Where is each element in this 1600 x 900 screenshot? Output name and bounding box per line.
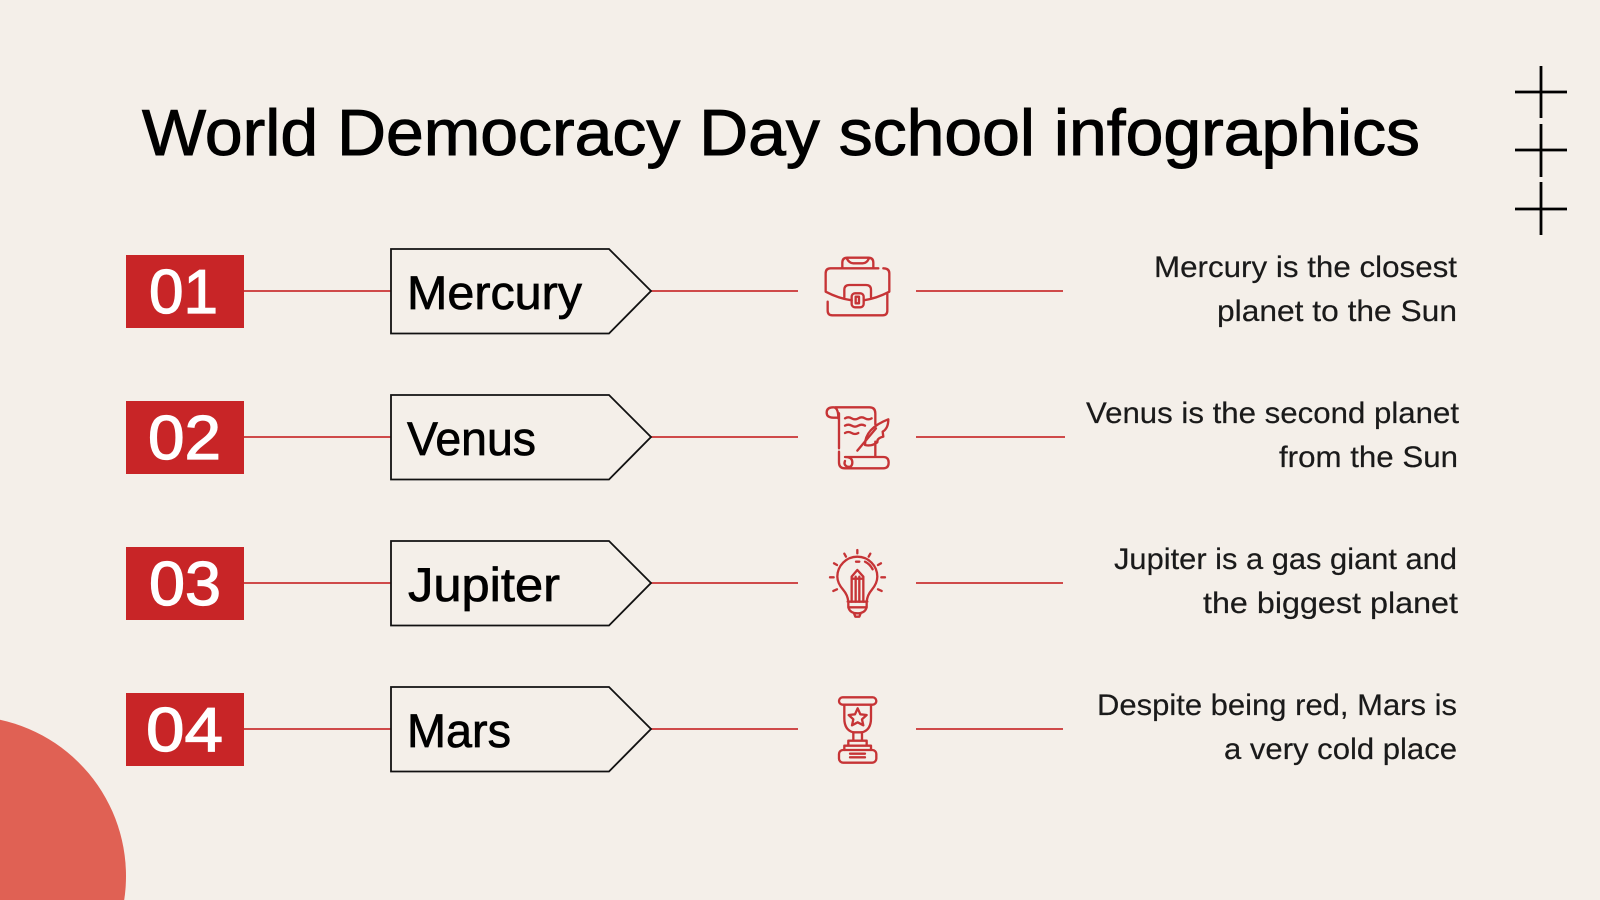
connector lines (244, 436, 1065, 438)
row 3: Jupiter (126, 541, 1459, 626)
label tag Mars: Mars (407, 704, 511, 757)
icon: scroll and quill (827, 407, 889, 468)
description: from the Sun (1279, 441, 1458, 474)
icon: light bulb with pencil (830, 550, 885, 617)
description: the biggest planet (1203, 587, 1459, 620)
number badge 04 (126, 693, 244, 766)
label tag Mars (391, 687, 651, 772)
label tag Mercury (391, 249, 651, 334)
decorative circle bottom left (0, 720, 126, 900)
icon: trophy (839, 697, 876, 763)
description (1114, 543, 1459, 620)
connector lines (244, 728, 1063, 730)
number badge 04: 04 (146, 696, 223, 765)
number badge 02 (126, 401, 244, 474)
connector lines (244, 582, 1063, 584)
number badge 03: 03 (149, 550, 221, 619)
row 2: Venus (126, 395, 1460, 480)
number badge 03 (126, 547, 244, 620)
description: Despite being red, Mars is (1097, 689, 1457, 722)
number badge 01: 01 (149, 258, 218, 327)
row 4: Mars (126, 687, 1457, 772)
label tag Jupiter: Jupiter (408, 558, 560, 611)
description: planet to the Sun (1217, 295, 1457, 328)
description (1086, 397, 1460, 474)
title: World Democracy Day school infographics (142, 96, 1420, 169)
label tag Venus: Venus (407, 412, 536, 465)
row 1: Mercury (126, 249, 1458, 334)
icon: three plus signs (1515, 66, 1567, 235)
description (1154, 251, 1458, 328)
description: Mercury is the closest (1154, 251, 1458, 284)
description: a very cold place (1224, 733, 1457, 766)
number badge 02: 02 (148, 404, 221, 473)
description: Venus is the second planet (1086, 397, 1460, 430)
number badge 01 (126, 255, 244, 328)
description (1097, 689, 1457, 766)
label tag Venus (391, 395, 651, 480)
icon: briefcase (826, 258, 889, 315)
label tag Jupiter (391, 541, 651, 626)
description: Jupiter is a gas giant and (1114, 543, 1457, 576)
connector lines (244, 290, 1063, 292)
label tag Mercury: Mercury (407, 266, 583, 319)
